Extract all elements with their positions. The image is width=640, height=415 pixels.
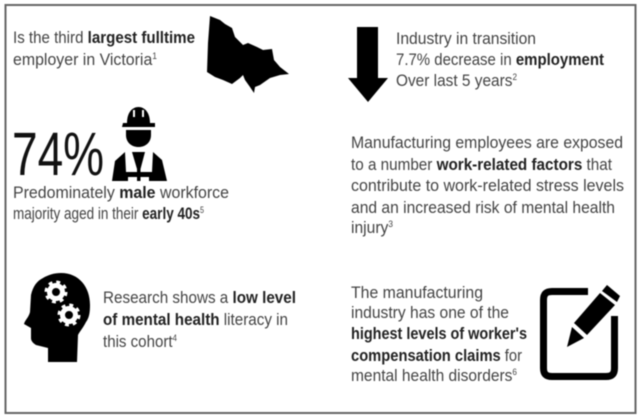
panel: industry in transition <box>348 27 604 102</box>
text: work-related factors: to a number work-related factors that <box>351 155 612 174</box>
panel: male workforce <box>12 107 229 223</box>
icon: pencil in square <box>544 285 620 376</box>
text: mental health literacy: of mental health literacy in <box>103 310 288 329</box>
text: work-related factors: 3 <box>388 219 393 229</box>
panel: compensation claims <box>351 283 620 385</box>
text: male workforce: Predominately male workforce <box>13 183 229 202</box>
icon: head with gears <box>24 273 90 362</box>
text: third largest employer: Is the third largest fulltime <box>13 28 195 47</box>
text: mental health literacy <box>103 288 296 351</box>
stat: 74%: 74% <box>12 121 104 189</box>
text: industry in transition: 2 <box>512 72 517 82</box>
icon: gear lower <box>59 305 79 325</box>
text: work-related factors: injury <box>351 218 392 237</box>
text: mental health literacy: this cohort <box>103 332 181 351</box>
text: industry in transition <box>396 29 604 90</box>
text: compensation claims: mental health disorders <box>351 366 528 385</box>
text: compensation claims: 6 <box>512 367 517 377</box>
text: work-related factors: and an increased risk of mental health <box>351 198 615 217</box>
text: male workforce: majority aged in their early 40s <box>13 204 215 223</box>
panel: work-related factors <box>351 133 624 237</box>
text: work-related factors <box>351 133 624 237</box>
text: third largest employer: 1 <box>152 51 157 61</box>
panel: mental health literacy <box>24 273 296 362</box>
text: industry in transition: Over last 5 years <box>396 71 524 90</box>
text: mental health literacy: Research shows a low level <box>103 288 296 307</box>
text: compensation claims: highest levels of worker's <box>351 324 527 343</box>
icon: worker with hard hat <box>112 107 167 181</box>
panel: third largest employer <box>13 16 289 93</box>
text: industry in transition: 7.7% decrease in employment <box>396 50 604 69</box>
icon: map of Victoria <box>207 16 289 93</box>
text: compensation claims <box>351 283 527 385</box>
text: mental health literacy: 4 <box>173 333 177 343</box>
icon: down arrow <box>348 27 388 102</box>
text: work-related factors: contribute to work-related stress levels <box>351 176 624 195</box>
icon: gear upper <box>46 282 66 302</box>
text: compensation claims: industry has one of the <box>351 303 509 322</box>
text: industry in transition: Industry in transition <box>396 29 536 48</box>
text: compensation claims: compensation claims for <box>351 346 522 365</box>
text: compensation claims: The manufacturing <box>351 283 483 302</box>
text: male workforce <box>13 183 229 223</box>
text: third largest employer <box>13 28 195 69</box>
text: work-related factors: Manufacturing employees are exposed <box>351 133 623 152</box>
text: third largest employer: employer in Victoria <box>13 50 162 69</box>
text: male workforce: 5 <box>200 205 204 215</box>
